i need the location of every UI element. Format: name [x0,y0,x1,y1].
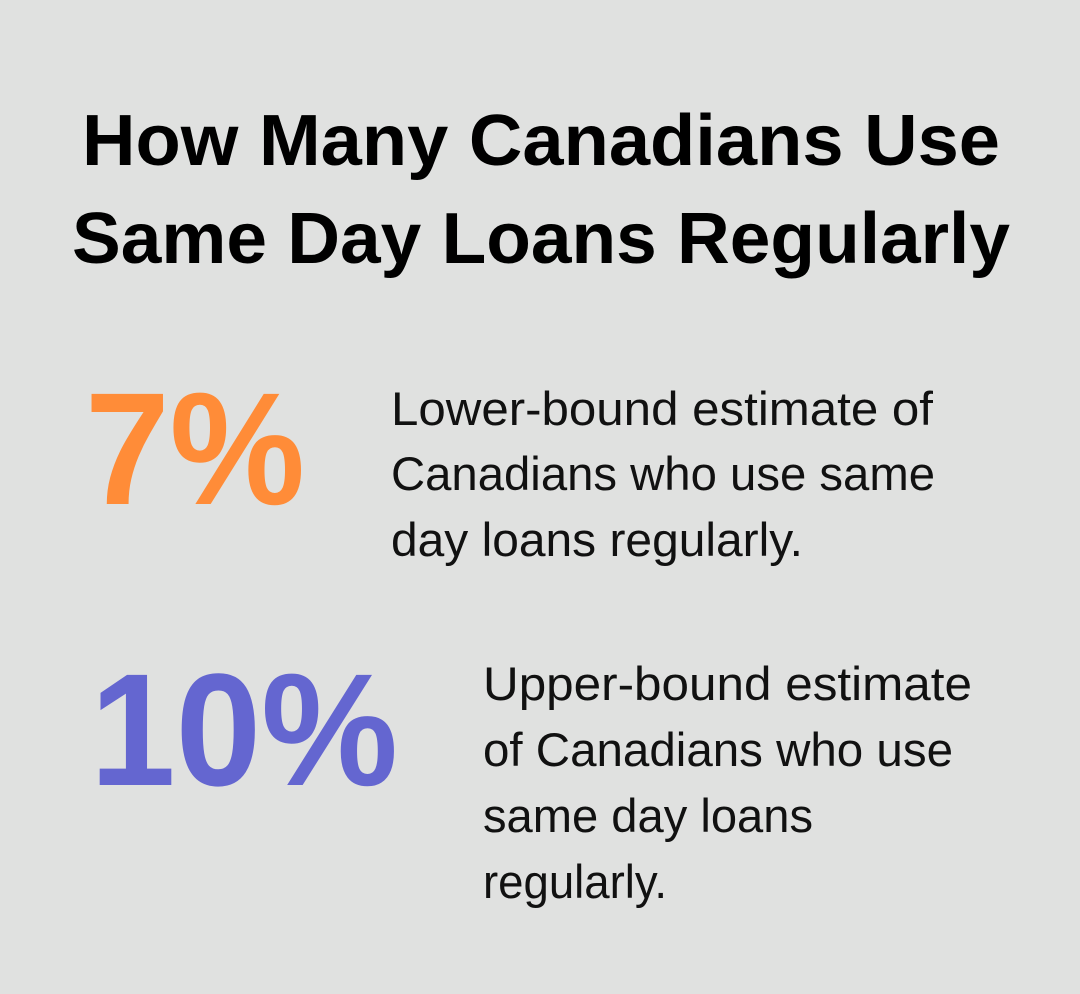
description 10%: regularly. [483,855,667,908]
description 7%: Canadians who use same [391,447,935,500]
description 10%: Upper-bound estimate [483,657,972,710]
number 10%: 10% [90,640,398,819]
description 10% [483,657,972,908]
title: How Many Canadians Use [82,101,1000,181]
stat: 10% [90,640,972,908]
description 7%: day loans regularly. [391,513,803,566]
description 10%: of Canadians who use [483,723,953,776]
stat: 7% [85,359,935,566]
description 10%: same day loans [483,789,813,842]
title: Same Day Loans Regularly [72,199,1010,279]
description 7%: Lower-bound estimate of [391,382,934,435]
number 7%: 7% [85,359,305,538]
title [72,101,1010,279]
description 7% [391,382,935,566]
